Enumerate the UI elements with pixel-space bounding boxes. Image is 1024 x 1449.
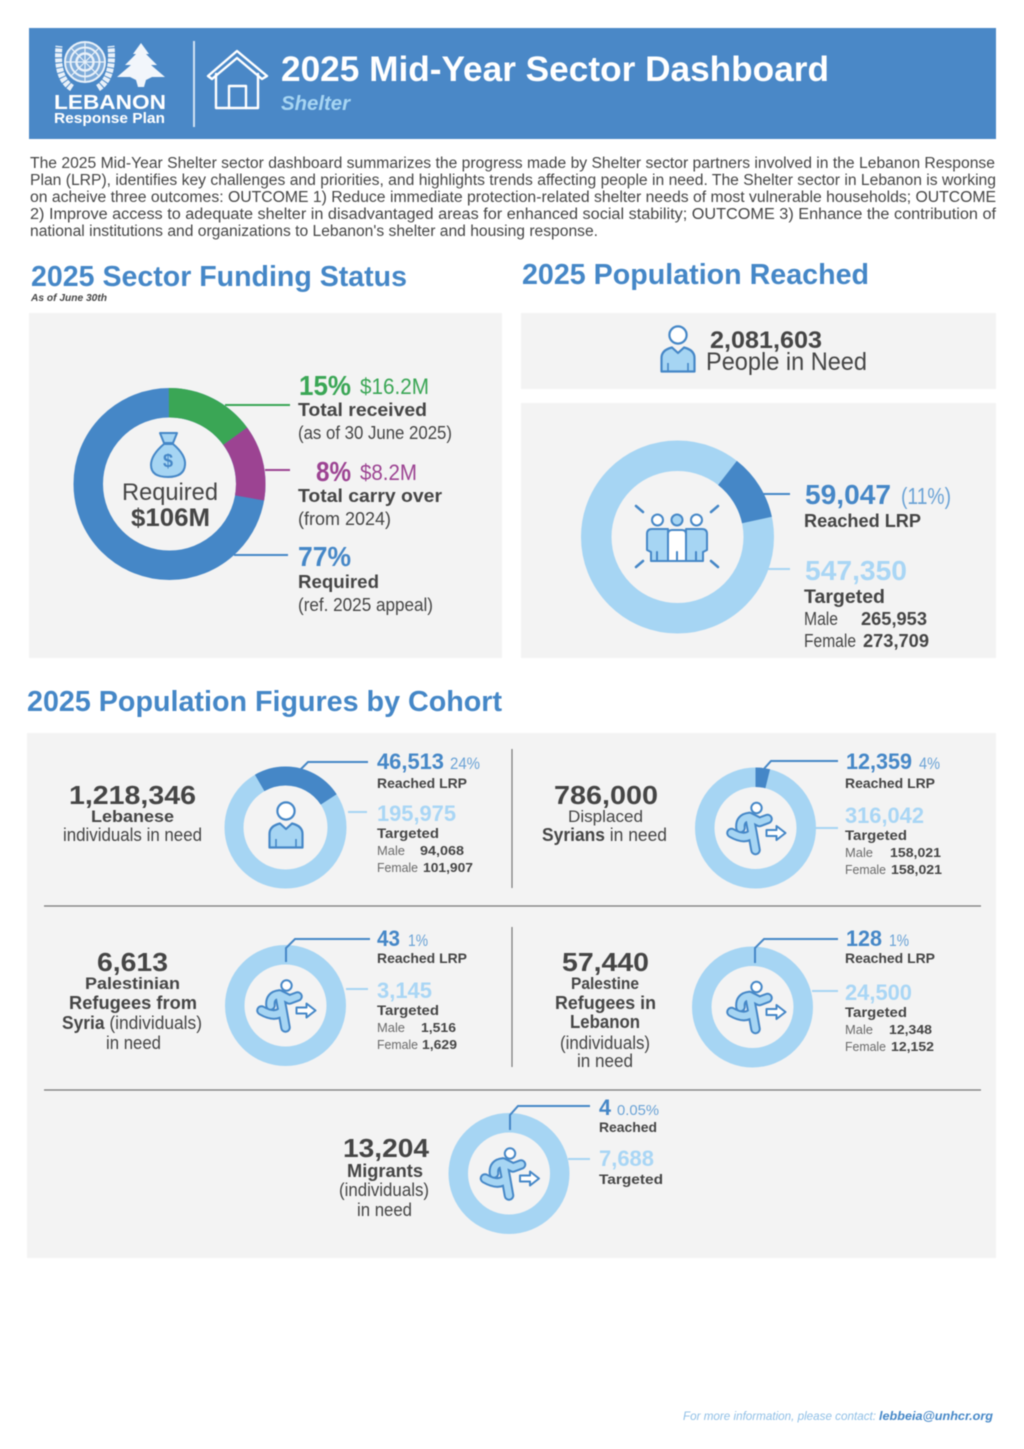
cohort: Palestinian refugees from Syria — [62, 926, 467, 1056]
cohort summary: individuals in need — [63, 825, 202, 845]
heading: population figures by cohort: 2025 Population Figures by Cohort — [27, 686, 502, 718]
figures: 316,042 — [845, 803, 924, 828]
cohort summary: Lebanese — [91, 807, 174, 826]
figures: 3,145 — [377, 978, 432, 1003]
people in need label: People in Need — [706, 348, 867, 376]
intro paragraph: national institutions and organizations to Lebanon's shelter and housing response. — [30, 223, 598, 240]
intro paragraph — [30, 155, 997, 240]
label: targeted: 273,709 — [863, 631, 929, 651]
icon: house — [208, 51, 267, 108]
label: total carry over: (from 2024) — [298, 509, 391, 529]
donut chart — [702, 956, 803, 1058]
figures: 4 — [599, 1095, 612, 1120]
figures: 158,021 — [890, 845, 941, 860]
subtitle: Shelter — [281, 93, 351, 115]
label: total received: Total received — [298, 400, 427, 420]
cohort summary: Palestinian — [85, 974, 180, 993]
icon: UN emblem — [59, 42, 111, 88]
label: total carry over: 8% — [316, 456, 351, 487]
heading: funding status: 2025 Sector Funding Status — [31, 261, 407, 293]
figures: Reached LRP — [845, 950, 935, 966]
label: total carry over: $8.2M — [360, 460, 417, 485]
figures — [377, 926, 467, 1052]
figures: Female — [377, 1037, 418, 1052]
label: required: Required — [298, 572, 379, 592]
figures: Targeted — [845, 1004, 907, 1020]
figures: Reached LRP — [377, 775, 467, 791]
cohort summary — [63, 780, 202, 845]
figures — [377, 749, 480, 875]
logo: Lebanon Response Plan — [54, 42, 166, 127]
label: targeted: Female — [804, 631, 856, 651]
label: reached: 59,047 — [805, 479, 891, 510]
icon: running person with arrow — [732, 803, 786, 850]
icon: person — [662, 326, 694, 372]
footer contact — [683, 1409, 994, 1423]
cohort summary: in need — [106, 1033, 161, 1053]
figures: 94,068 — [420, 843, 464, 858]
label: total received: (as of 30 June 2025) — [298, 423, 452, 443]
cohort: migrants — [339, 1095, 663, 1224]
figures: 24,500 — [845, 980, 912, 1005]
heading: population reached: 2025 Population Reached — [522, 259, 869, 291]
funding date note: As of June 30th — [30, 293, 107, 304]
label: total received: $16.2M — [360, 374, 429, 399]
donut chart — [458, 1123, 560, 1224]
cohort summary: in need — [577, 1051, 633, 1071]
label: targeted: 547,350 — [805, 555, 907, 586]
label: targeted: Male — [804, 609, 838, 629]
figures: 12,359 — [846, 749, 912, 774]
figures: Male — [845, 845, 873, 860]
footer contact: lebbeia@unhcr.org — [879, 1409, 994, 1423]
figures — [845, 749, 942, 877]
figures: 46,513 — [377, 749, 444, 774]
cohort summary: 1,218,346 — [69, 780, 196, 810]
leader lines — [225, 405, 290, 555]
icon: running person with arrow — [732, 982, 786, 1029]
cohort summary: Lebanon — [570, 1012, 640, 1032]
cohort summary: Displaced — [568, 807, 643, 826]
figures: 1,516 — [421, 1020, 456, 1035]
figures: 7,688 — [599, 1146, 654, 1171]
figures: Targeted — [599, 1171, 663, 1187]
figures: 101,907 — [423, 860, 473, 875]
cohort summary: 786,000 — [554, 780, 658, 810]
cohort summary: Migrants — [347, 1161, 423, 1181]
figures: Female — [377, 860, 418, 875]
cohort summary — [339, 1133, 430, 1220]
cohort summary — [555, 947, 656, 1071]
cohort: displaced Syrians — [542, 749, 942, 879]
label: required: (ref. 2025 appeal) — [298, 595, 433, 615]
cohort summary — [542, 780, 667, 845]
icon: running person with arrow — [485, 1148, 539, 1196]
figures: Reached LRP — [377, 950, 467, 966]
icon: money bag — [151, 433, 185, 477]
figures: Reached — [599, 1119, 657, 1135]
figures: Female — [845, 1039, 886, 1054]
panel: funding status — [29, 313, 502, 658]
figures: 4% — [919, 754, 940, 773]
cohort summary: Syria (individuals) — [62, 1013, 202, 1033]
cohort summary: in need — [357, 1200, 412, 1220]
panel: funding status: $ — [163, 451, 173, 471]
people in need figure: 2,081,603 — [710, 327, 822, 354]
cohort summary: 6,613 — [97, 947, 168, 977]
figures: Male — [377, 843, 405, 858]
figures: 195,975 — [377, 801, 456, 826]
label: required — [298, 541, 433, 615]
icon: running person with arrow — [262, 980, 316, 1028]
label: targeted: 265,953 — [861, 609, 927, 629]
leader lines — [763, 494, 790, 569]
figures — [599, 1095, 663, 1187]
figures: 1,629 — [422, 1037, 457, 1052]
intro paragraph: The 2025 Mid-Year Shelter sector dashboard summarizes the progress made by Shelter sector partners involved in the Lebanon Response — [30, 155, 995, 172]
donut chart — [234, 776, 337, 879]
cohort summary: Palestine — [571, 974, 639, 993]
cohort summary: Refugees from — [69, 993, 197, 1013]
figures: 0.05% — [617, 1102, 659, 1119]
donut centre label: Required — [122, 479, 218, 506]
cohort summary: Syrians in need — [542, 825, 667, 845]
figures: Female — [845, 862, 886, 877]
figures: 24% — [450, 754, 480, 773]
label: total received — [298, 370, 452, 443]
intro paragraph: 2) Improve access to adequate shelter in disadvantaged areas for enhanced social stability; OUTCOME 3) Enhance the contribution of — [30, 206, 997, 223]
donut chart: funding — [88, 403, 251, 565]
cohort: Palestine refugees in Lebanon — [555, 926, 935, 1071]
panel: cohorts — [27, 733, 996, 1258]
label: reached — [804, 479, 951, 531]
panel: population reached — [521, 403, 996, 658]
label: targeted — [804, 555, 929, 651]
figures: 12,348 — [889, 1022, 932, 1037]
label: targeted: Targeted — [804, 587, 885, 608]
label: reached: Reached LRP — [804, 511, 921, 531]
logo: Lebanon Response Plan: Response Plan — [54, 111, 165, 127]
figures: 158,021 — [891, 862, 942, 877]
label: required: 77% — [298, 541, 351, 572]
cohort summary: 57,440 — [562, 947, 649, 977]
intro paragraph: Plan (LRP), identifies key challenges and priorities, and highlights trends affecting people in need. The Shelter sector in Lebanon is working — [30, 172, 996, 189]
figures: 128 — [846, 926, 882, 951]
figures: Male — [377, 1020, 405, 1035]
label: total received: 15% — [299, 370, 351, 401]
figures: Targeted — [377, 1002, 439, 1018]
icon: group of people — [636, 506, 718, 567]
logo text: LEBANON — [54, 92, 166, 114]
intro paragraph: on acheive three outcomes: OUTCOME 1) Reduce immediate protection-related shelter needs of most vulnerable households; OUTCOME — [30, 189, 996, 206]
footer contact: For more information, please contact: — [683, 1409, 876, 1423]
label: reached: (11%) — [901, 483, 951, 509]
donut chart: reached vs targeted — [596, 456, 759, 618]
figures — [845, 926, 935, 1054]
panel: people in need — [521, 313, 996, 389]
icon: person — [270, 802, 302, 848]
cohort summary: (individuals) — [560, 1033, 650, 1053]
figures: 12,152 — [891, 1039, 934, 1054]
cohort summary: 13,204 — [343, 1133, 430, 1163]
title: 2025 Mid-Year Sector Dashboard — [281, 50, 829, 89]
donut centre label — [122, 479, 218, 532]
donut centre label: $106M — [131, 504, 210, 532]
donut chart — [235, 955, 336, 1056]
figures: Male — [845, 1022, 873, 1037]
header banner — [29, 28, 996, 139]
cohort summary: (individuals) — [339, 1180, 429, 1200]
figures: Targeted — [377, 825, 439, 841]
figures: 1% — [889, 931, 909, 950]
label: total carry over — [298, 456, 442, 529]
cohort summary: Refugees in — [555, 993, 656, 1013]
cohort: Lebanese — [63, 749, 480, 879]
icon: cedar tree — [117, 43, 165, 87]
donut chart — [705, 777, 806, 879]
figures: Targeted — [845, 827, 907, 843]
cohort summary — [62, 947, 202, 1053]
figures: 43 — [377, 926, 400, 951]
label: total carry over: Total carry over — [298, 486, 442, 506]
figures: 1% — [408, 931, 428, 950]
figures: Reached LRP — [845, 775, 935, 791]
